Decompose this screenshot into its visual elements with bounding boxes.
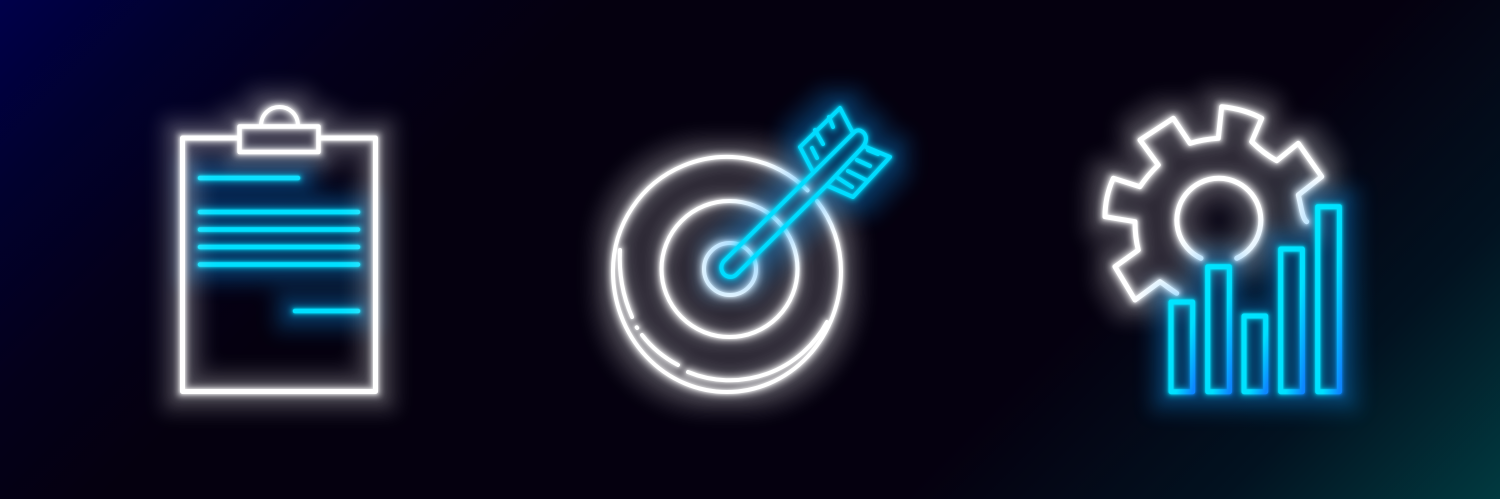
icon: target with arrow (613, 108, 890, 392)
clipboard text lines (200, 178, 358, 311)
clipboard board and clip outline (182, 107, 376, 392)
target rings (613, 157, 841, 392)
bar chart (1171, 207, 1339, 392)
gear (1105, 107, 1322, 300)
icon: gear with bar chart (1105, 107, 1339, 392)
icon: clipboard (182, 107, 376, 392)
arrow (721, 108, 890, 277)
